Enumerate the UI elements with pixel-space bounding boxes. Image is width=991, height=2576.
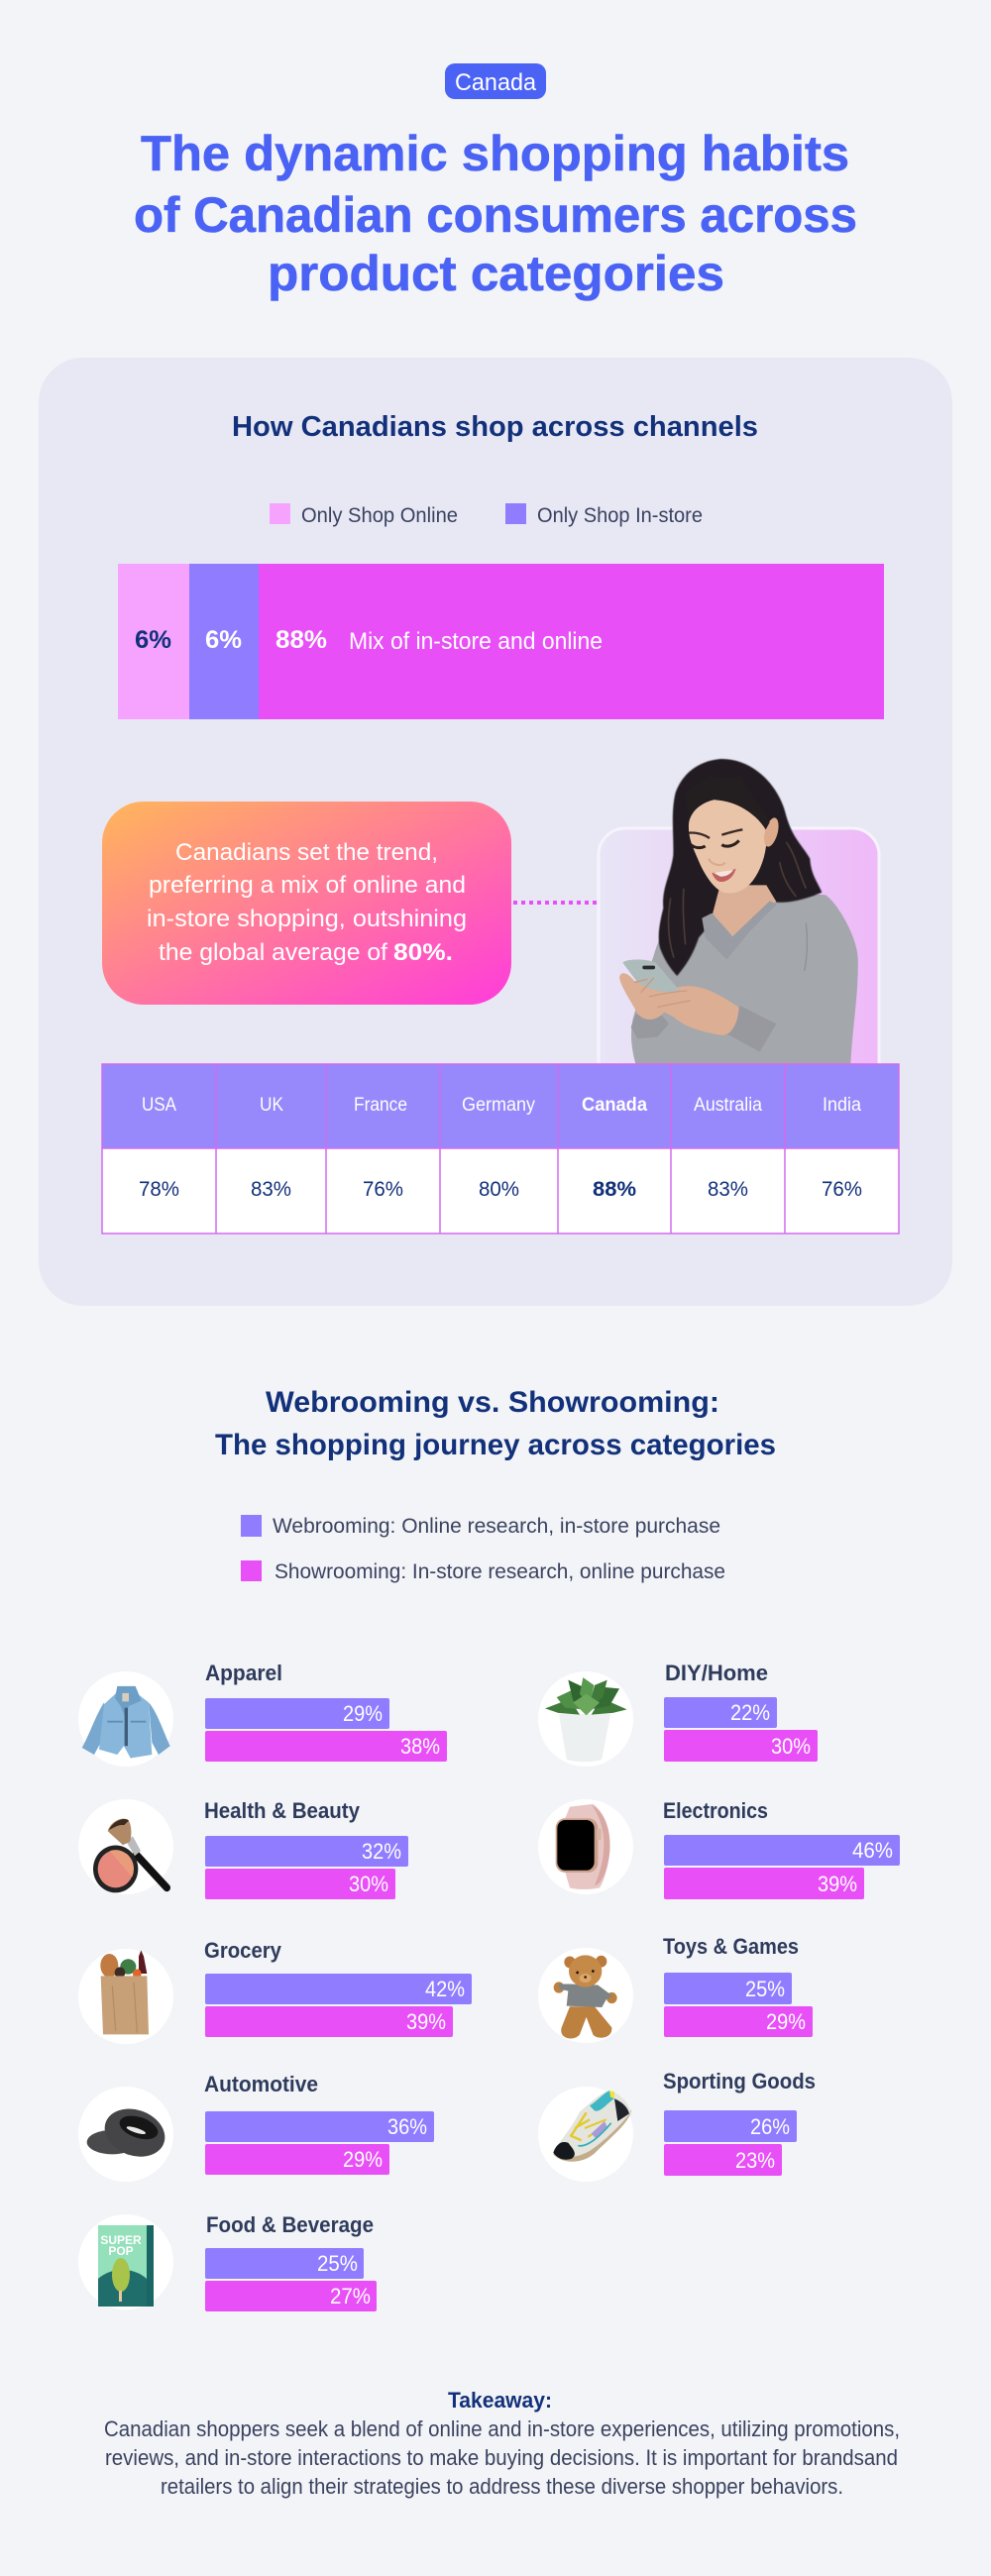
icon: running shoe	[538, 2087, 633, 2182]
table values row: 76%	[363, 1178, 403, 1201]
bar: health and beauty webrooming 32%	[205, 1836, 408, 1867]
panel: channels	[39, 358, 952, 1306]
label: electronics: Electronics	[663, 1798, 768, 1823]
bar: sporting goods webrooming 26%	[664, 2110, 797, 2142]
callout: global average: the global average of	[159, 939, 387, 966]
category: diy home	[538, 1661, 818, 1767]
category: automotive	[78, 2072, 434, 2182]
label: automotive: Automotive	[204, 2072, 318, 2096]
label: sporting goods: Sporting Goods	[663, 2069, 816, 2093]
table header row: Canada	[582, 1095, 647, 1116]
bar: grocery showrooming 39%	[205, 2006, 453, 2037]
bar: automotive webrooming 36%: 36%	[387, 2114, 427, 2139]
heading: channels: How Canadians shop across channels	[232, 411, 758, 443]
table header row: USA	[142, 1095, 176, 1116]
bar: toys and games showrooming 29%	[664, 2006, 813, 2037]
legend: webrooming: Webrooming: Online research, in-store purchase	[273, 1515, 720, 1538]
icon: stacked tires	[78, 2087, 173, 2182]
callout: global average: in-store shopping, outshining	[147, 906, 467, 932]
category: sporting goods	[538, 2069, 816, 2182]
callout: global average	[102, 802, 511, 1005]
label: diy home: DIY/Home	[665, 1661, 768, 1685]
legend: only shop online: Only Shop Online	[301, 504, 458, 527]
bar: apparel webrooming 29%	[205, 1698, 389, 1729]
bar: grocery showrooming 39%: 39%	[406, 2009, 446, 2034]
icon: popsicle box	[78, 2214, 173, 2309]
connector: dotted line	[513, 901, 666, 905]
bar: grocery webrooming 42%: 42%	[425, 1977, 465, 2001]
takeaway text: Canadian shoppers seek a blend of online and in-store experiences, utilizing promotions,	[104, 2416, 900, 2441]
icon: popsicle box: SUPER	[100, 2233, 142, 2247]
label: apparel: Apparel	[205, 1661, 282, 1685]
table header row: UK	[260, 1095, 283, 1116]
bar: toys and games webrooming 25%: 25%	[745, 1977, 785, 2001]
label: food and beverage: Food & Beverage	[206, 2212, 374, 2237]
category: grocery	[78, 1938, 472, 2044]
bar: diy home showrooming 30%	[664, 1730, 818, 1762]
bar: diy home showrooming 30%: 30%	[771, 1734, 811, 1759]
label: health and beauty: Health & Beauty	[204, 1798, 361, 1823]
bar: toys and games showrooming 29%: 29%	[766, 2009, 806, 2034]
bar: diy home webrooming 22%	[664, 1697, 777, 1728]
takeaway text: Takeaway:	[448, 2388, 552, 2413]
bar: grocery webrooming 42%	[205, 1974, 472, 2004]
bar: health and beauty webrooming 32%: 32%	[362, 1839, 401, 1864]
bar: diy home webrooming 22%: 22%	[730, 1700, 770, 1725]
stacked bar: channel mix	[118, 564, 884, 719]
stacked bar: channel mix: Mix of in-store and online	[349, 628, 603, 655]
icon: blush and brush	[78, 1799, 173, 1894]
table header row: India	[823, 1095, 861, 1116]
legend: only shop in-store: Only Shop In-store	[537, 504, 703, 527]
table values row: 88%	[593, 1178, 636, 1201]
bar: food and beverage webrooming 25%	[205, 2248, 364, 2279]
bar: apparel showrooming 38%: 38%	[400, 1734, 440, 1759]
bar: food and beverage showrooming 27%	[205, 2281, 377, 2311]
legend: showrooming: Showrooming: In-store research, online purchase	[275, 1560, 725, 1583]
table values row: 78%	[139, 1178, 179, 1201]
bar: electronics showrooming 39%	[664, 1868, 864, 1899]
table values row: 83%	[708, 1178, 748, 1201]
icon: grocery bag	[78, 1949, 173, 2044]
country tag	[445, 63, 546, 99]
bar: health and beauty showrooming 30%: 30%	[349, 1872, 388, 1896]
bar: sporting goods showrooming 23%	[664, 2144, 782, 2176]
callout: global average: Canadians set the trend,	[175, 839, 438, 866]
bar: electronics webrooming 46%: 46%	[852, 1838, 893, 1863]
heading: webrooming vs showrooming	[215, 1386, 776, 1461]
heading: webrooming vs showrooming: Webrooming vs. Showrooming:	[266, 1386, 719, 1419]
table header row: France	[354, 1095, 407, 1116]
bar: apparel showrooming 38%	[205, 1731, 447, 1762]
heading: webrooming vs showrooming: The shopping journey across categories	[215, 1429, 776, 1461]
bar: automotive webrooming 36%	[205, 2111, 434, 2142]
table header row: Germany	[462, 1095, 535, 1116]
table: mix share by country	[102, 1064, 899, 1234]
takeaway text: retailers to align their strategies to address these diverse shopper behaviors.	[161, 2474, 843, 2499]
category: health and beauty	[78, 1798, 408, 1899]
takeaway text: reviews, and in-store interactions to make buying decisions. It is important for brandsand	[105, 2445, 898, 2470]
bar: food and beverage showrooming 27%: 27%	[330, 2284, 371, 2308]
callout: global average: 80%.	[393, 939, 453, 966]
table header row: Australia	[694, 1095, 762, 1116]
title: of Canadian consumers across	[134, 187, 857, 243]
table values row: 80%	[479, 1178, 519, 1201]
icon: denim jacket	[78, 1671, 173, 1767]
callout: global average: preferring a mix of online and	[149, 872, 466, 899]
table values row: 83%	[251, 1178, 291, 1201]
bar: food and beverage webrooming 25%: 25%	[317, 2251, 358, 2276]
category: electronics	[538, 1798, 900, 1899]
category: toys and games	[538, 1934, 813, 2043]
bar: sporting goods showrooming 23%: 23%	[735, 2148, 775, 2173]
bar: apparel webrooming 29%: 29%	[343, 1701, 383, 1726]
category: apparel	[78, 1661, 447, 1767]
bar: health and beauty showrooming 30%	[205, 1869, 395, 1899]
title: product categories	[268, 246, 724, 301]
icon: popsicle box: POP	[108, 2244, 134, 2258]
bar: sporting goods webrooming 26%: 26%	[750, 2114, 790, 2139]
category: food and beverage	[78, 2212, 377, 2311]
icon: smartwatch	[538, 1799, 633, 1894]
table values row	[139, 1178, 862, 1201]
stacked bar: channel mix: 6%	[135, 626, 171, 654]
photo: woman using smartphone	[619, 759, 858, 1065]
photo frame	[599, 828, 879, 1126]
country tag: Canada	[455, 69, 537, 96]
bar: automotive showrooming 29%	[205, 2144, 389, 2175]
icon: teddy bear	[538, 1948, 633, 2043]
stacked bar: channel mix: 88%	[275, 626, 327, 654]
bar: electronics showrooming 39%: 39%	[818, 1872, 857, 1896]
bar: electronics webrooming 46%	[664, 1835, 900, 1866]
bar: toys and games webrooming 25%	[664, 1973, 792, 2004]
takeaway text	[104, 2388, 900, 2499]
icon: potted succulent	[538, 1671, 633, 1767]
label: grocery: Grocery	[204, 1938, 282, 1963]
stacked bar: channel mix: 6%	[205, 626, 242, 654]
table header row	[142, 1095, 861, 1116]
label: toys and games: Toys & Games	[663, 1934, 799, 1959]
title	[134, 126, 857, 301]
table values row: 76%	[822, 1178, 862, 1201]
title: The dynamic shopping habits	[141, 126, 849, 181]
bar: automotive showrooming 29%: 29%	[343, 2147, 383, 2172]
